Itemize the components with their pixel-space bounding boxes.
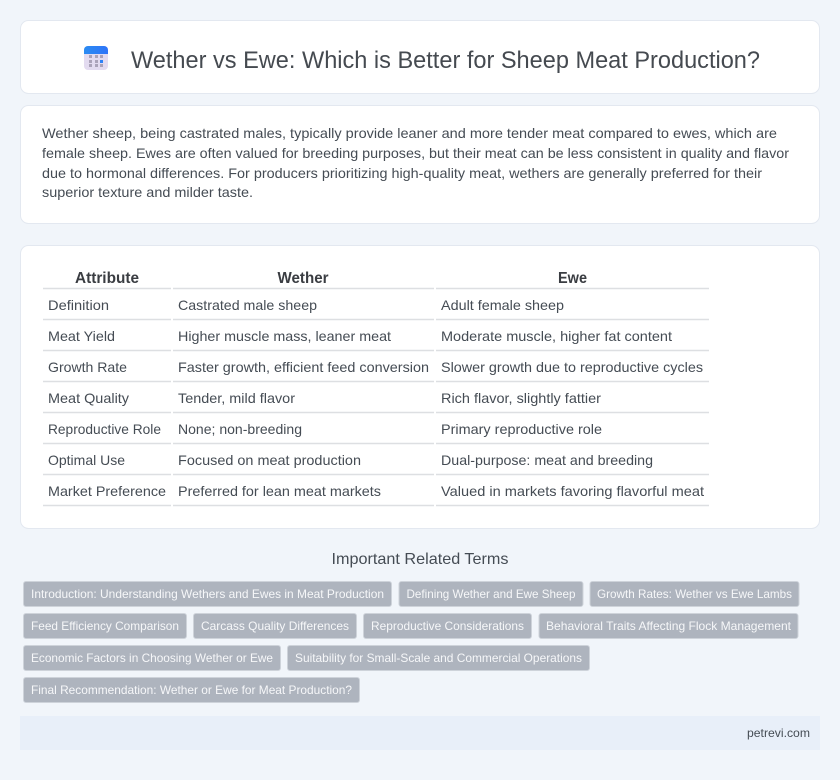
table header <box>75 270 587 287</box>
icon: calendar <box>84 46 108 70</box>
table rows: Focused on meat production <box>178 452 361 468</box>
table rows: Market Preference <box>48 483 166 499</box>
table rows: Slower growth due to reproductive cycles <box>441 359 703 375</box>
related term tags: Carcass Quality Differences <box>201 619 349 633</box>
related term tags: Suitability for Small-Scale and Commercial Operations <box>295 651 582 665</box>
footer source: petrevi.com <box>747 726 810 740</box>
panel: introduction <box>20 106 820 224</box>
table rows: Meat Yield <box>48 328 115 344</box>
table rows: Meat Quality <box>48 390 129 406</box>
table rows: Primary reproductive role <box>441 421 602 437</box>
table rows: Optimal Use <box>48 452 125 468</box>
intro text: Wether sheep, being castrated males, typically provide leaner and more tender meat compared to ewes, which are <box>42 125 777 141</box>
table rows: Growth Rate <box>48 359 127 375</box>
table rows: Valued in markets favoring flavorful meat <box>441 483 704 499</box>
heading: related terms: Important Related Terms <box>332 551 508 568</box>
table rows: Moderate muscle, higher fat content <box>441 328 672 344</box>
table header: Wether <box>278 270 328 287</box>
intro text <box>42 125 789 200</box>
related term tags <box>24 582 799 702</box>
related term tags: Behavioral Traits Affecting Flock Management <box>546 619 792 633</box>
table rows: Castrated male sheep <box>178 297 317 313</box>
table rows: Higher muscle mass, leaner meat <box>178 328 391 344</box>
panel: header <box>20 20 820 94</box>
footer <box>20 716 820 750</box>
related term tags: Introduction: Understanding Wethers and Ewes in Meat Production <box>31 587 384 601</box>
table rows: Definition <box>48 297 109 313</box>
related term tags: Growth Rates: Wether vs Ewe Lambs <box>597 587 792 601</box>
table rows: Faster growth, efficient feed conversion <box>178 359 429 375</box>
table rows: Rich flavor, slightly fattier <box>441 390 601 406</box>
related term tags: Defining Wether and Ewe Sheep <box>406 587 576 601</box>
table header: Attribute <box>75 270 139 287</box>
table rows: Adult female sheep <box>441 297 564 313</box>
table rows: Preferred for lean meat markets <box>178 483 381 499</box>
table rows: Tender, mild flavor <box>178 390 295 406</box>
intro text: female sheep. Ewes are often valued for breeding purposes, but their meat can be less consistent in quality and flavor <box>42 145 789 161</box>
intro text: due to hormonal differences. For producers prioritizing high-quality meat, wethers are generally preferred for their <box>42 165 762 181</box>
table rows: Reproductive Role <box>48 421 161 437</box>
table rows: Dual-purpose: meat and breeding <box>441 452 653 468</box>
related term tags: Economic Factors in Choosing Wether or Ewe <box>31 651 273 665</box>
table rows <box>48 297 704 499</box>
table rows: None; non-breeding <box>178 421 302 437</box>
panel: comparison table <box>20 246 820 528</box>
table header: Ewe <box>558 270 587 287</box>
related term tags: Final Recommendation: Wether or Ewe for Meat Production? <box>31 683 352 697</box>
intro text: superior texture and milder taste. <box>42 184 253 200</box>
related term tags: Reproductive Considerations <box>371 619 524 633</box>
title: Wether vs Ewe: Which is Better for Sheep Meat Production? <box>131 47 760 74</box>
related term tags: Feed Efficiency Comparison <box>31 619 179 633</box>
